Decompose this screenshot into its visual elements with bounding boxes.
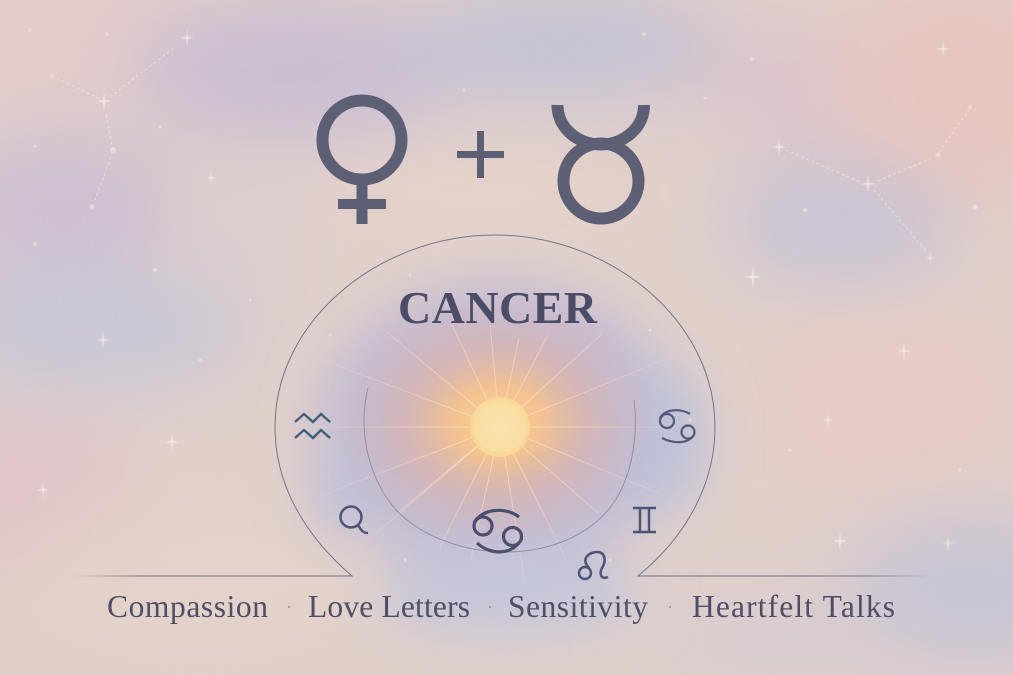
small star dots (28, 28, 978, 562)
keyword: Heartfelt Talks: Heartfelt Talks (692, 589, 895, 624)
icon: Gemini glyph (633, 508, 656, 532)
constellation: right (786, 108, 970, 252)
inner wheel arc (364, 388, 635, 552)
keyword: Compassion: Compassion (107, 589, 268, 624)
icon: Cancer glyph bottom centre (474, 510, 522, 552)
wheel glow (310, 278, 705, 637)
horoscope arch outline (70, 235, 935, 576)
sun rays (315, 325, 683, 583)
icon: Cancer glyph right (660, 410, 694, 442)
icon: Leo-like glyph left (340, 506, 368, 533)
sun (470, 397, 530, 457)
icon: Aquarius glyph (295, 414, 330, 438)
keyword: Sensitivity: Sensitivity (508, 589, 648, 624)
keyword list (107, 589, 895, 624)
icon: Venus symbol (322, 100, 402, 224)
icon: Leo glyph (579, 552, 608, 579)
sparkle stars (36, 29, 954, 551)
heading: Cancer: CANCER (398, 282, 598, 333)
keyword separators (288, 606, 671, 608)
icon: Taurus symbol (557, 105, 644, 218)
constellation: left (52, 48, 174, 200)
keyword: Love Letters: Love Letters (308, 589, 470, 624)
icon: plus sign (457, 131, 504, 178)
